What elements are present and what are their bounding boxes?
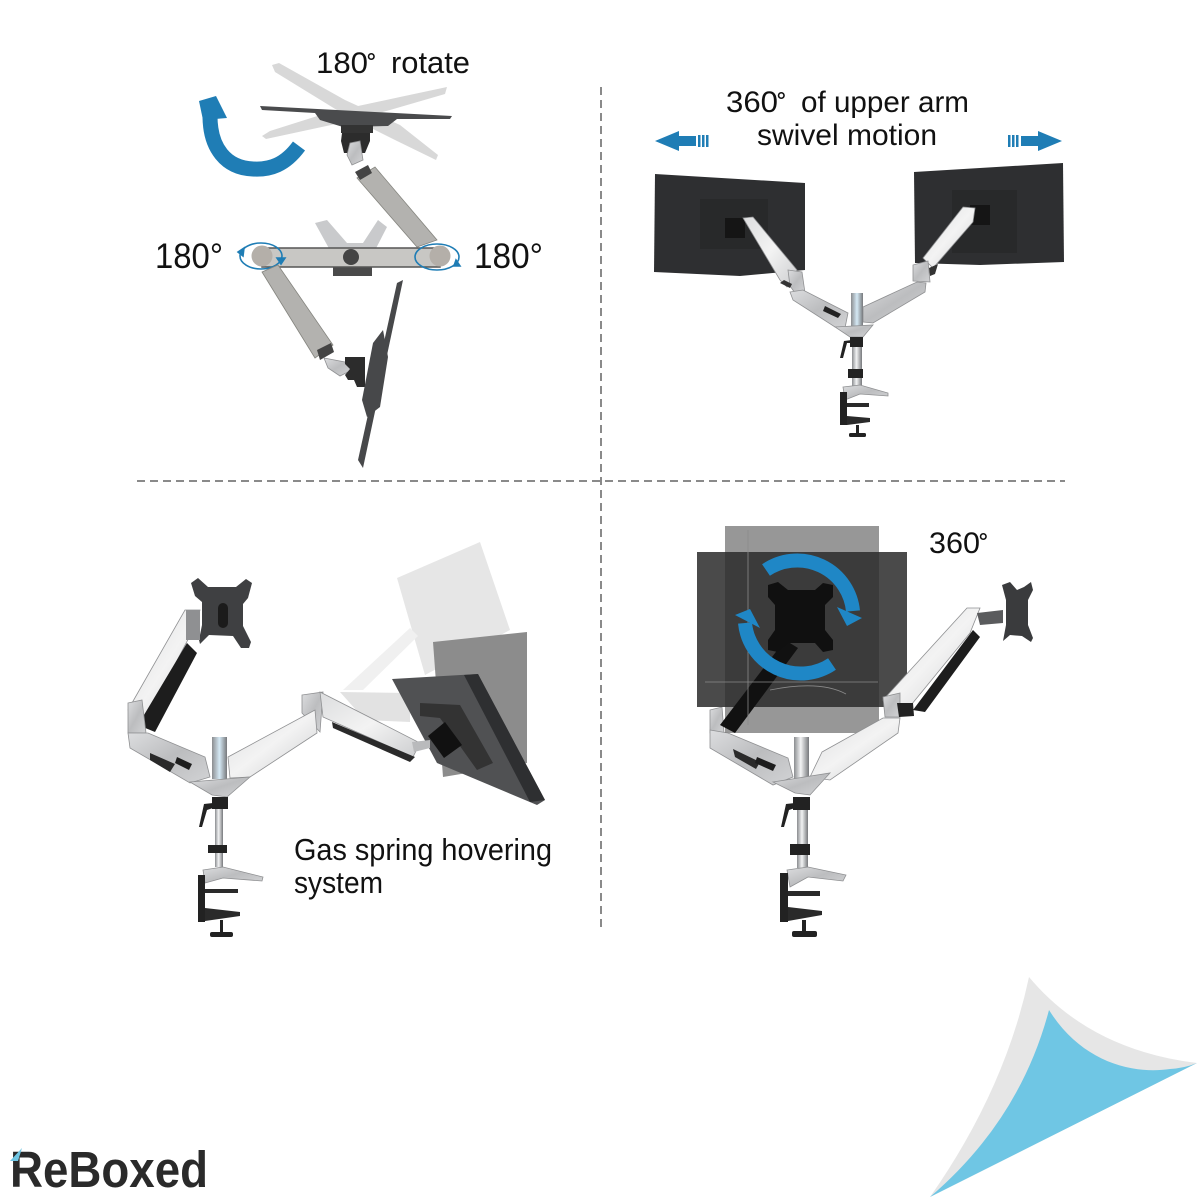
arrow: right: [1008, 131, 1062, 151]
decoration: page curl corner: [930, 977, 1197, 1197]
icon: lower arm: [262, 265, 333, 358]
icon: upper arm: [357, 167, 437, 247]
icon: ghost mid monitor: [433, 632, 527, 777]
icon: spring arm behind monitor: [720, 640, 798, 733]
heading: 180 rotate: ˚: [367, 51, 377, 84]
heading: swivel motion: swivel motion: [757, 119, 937, 152]
panel: 360 upper arm swivel: [654, 86, 1064, 437]
heading: swivel motion: ˚: [777, 90, 787, 123]
text: gas spring hovering system: system: [294, 865, 383, 900]
icon: right arm: [810, 608, 1003, 780]
icon: forward arm: [302, 692, 430, 762]
icon: monitor edge highlights: [705, 530, 878, 725]
dashed dividers: [137, 87, 1065, 931]
panel: 360 monitor rotation: [697, 526, 1033, 937]
icon: V bracket: [315, 220, 387, 263]
icon: left arm: [743, 217, 848, 328]
heading: swivel motion: 360: [726, 86, 778, 119]
icon: right monitor: [914, 163, 1064, 265]
label: 180 left: 180°: [155, 237, 223, 276]
heading: 180 rotate: [316, 45, 470, 84]
icon: pole and clamp: [190, 737, 263, 937]
panel: gas spring hovering: [128, 542, 552, 937]
icon: clamp behind bar: [333, 265, 372, 276]
icon: rotating monitor front sheet: [697, 552, 907, 707]
icon: ghost monitors: [262, 63, 447, 160]
icon: ghost raised monitor: [397, 542, 510, 675]
icon: left arm with spring: [128, 610, 210, 783]
icon: top monitor: [260, 106, 452, 165]
icon: lower joint: [317, 343, 365, 387]
heading: 180 rotate: rotate: [391, 45, 470, 80]
icon: side monitor: [358, 280, 403, 468]
icon: right rotation ring: [415, 244, 460, 270]
text: gas spring hovering system: Gas spring hovering: [294, 832, 552, 867]
icon: horizontal arm bar: [252, 246, 450, 267]
icon: left rotation ring: [238, 243, 285, 269]
logo: ReBoxed: ReBoxed: [10, 1141, 208, 1198]
icon: pole and clamp: [835, 293, 888, 437]
label: 360: 360: [929, 527, 980, 560]
icon: ghost arm: [343, 628, 418, 690]
icon: left monitor: [654, 174, 805, 276]
icon: right lower arm: [228, 710, 317, 778]
icon: tilted monitor: [392, 674, 545, 805]
icon: left arm and elbow: [710, 707, 793, 785]
icon: right arm: [863, 207, 975, 323]
icon: small mounting plate: [1002, 582, 1033, 642]
heading: swivel motion: [726, 86, 969, 152]
icon: ghost lower arm: [340, 692, 410, 722]
heading: 180 rotate: 180: [316, 47, 368, 80]
icon: pole and clamp: [773, 737, 846, 937]
icon: blue curved arrow: [199, 96, 299, 169]
heading: swivel motion: of upper arm: [801, 86, 969, 119]
icon: mounting plate: [191, 578, 252, 648]
label: 360: ˚: [979, 531, 989, 564]
icon: black mounting plate: [768, 582, 833, 652]
icon: arm joint clip: [355, 165, 372, 180]
icon: blue rotation arrows: [735, 560, 862, 674]
panel: 180 degree rotate: [155, 45, 543, 468]
icon: rotating monitor back sheet: [725, 526, 879, 733]
label: 180 right: 180°: [474, 237, 543, 276]
arrow: left: [655, 131, 708, 151]
text: gas spring hovering system: [294, 832, 552, 900]
